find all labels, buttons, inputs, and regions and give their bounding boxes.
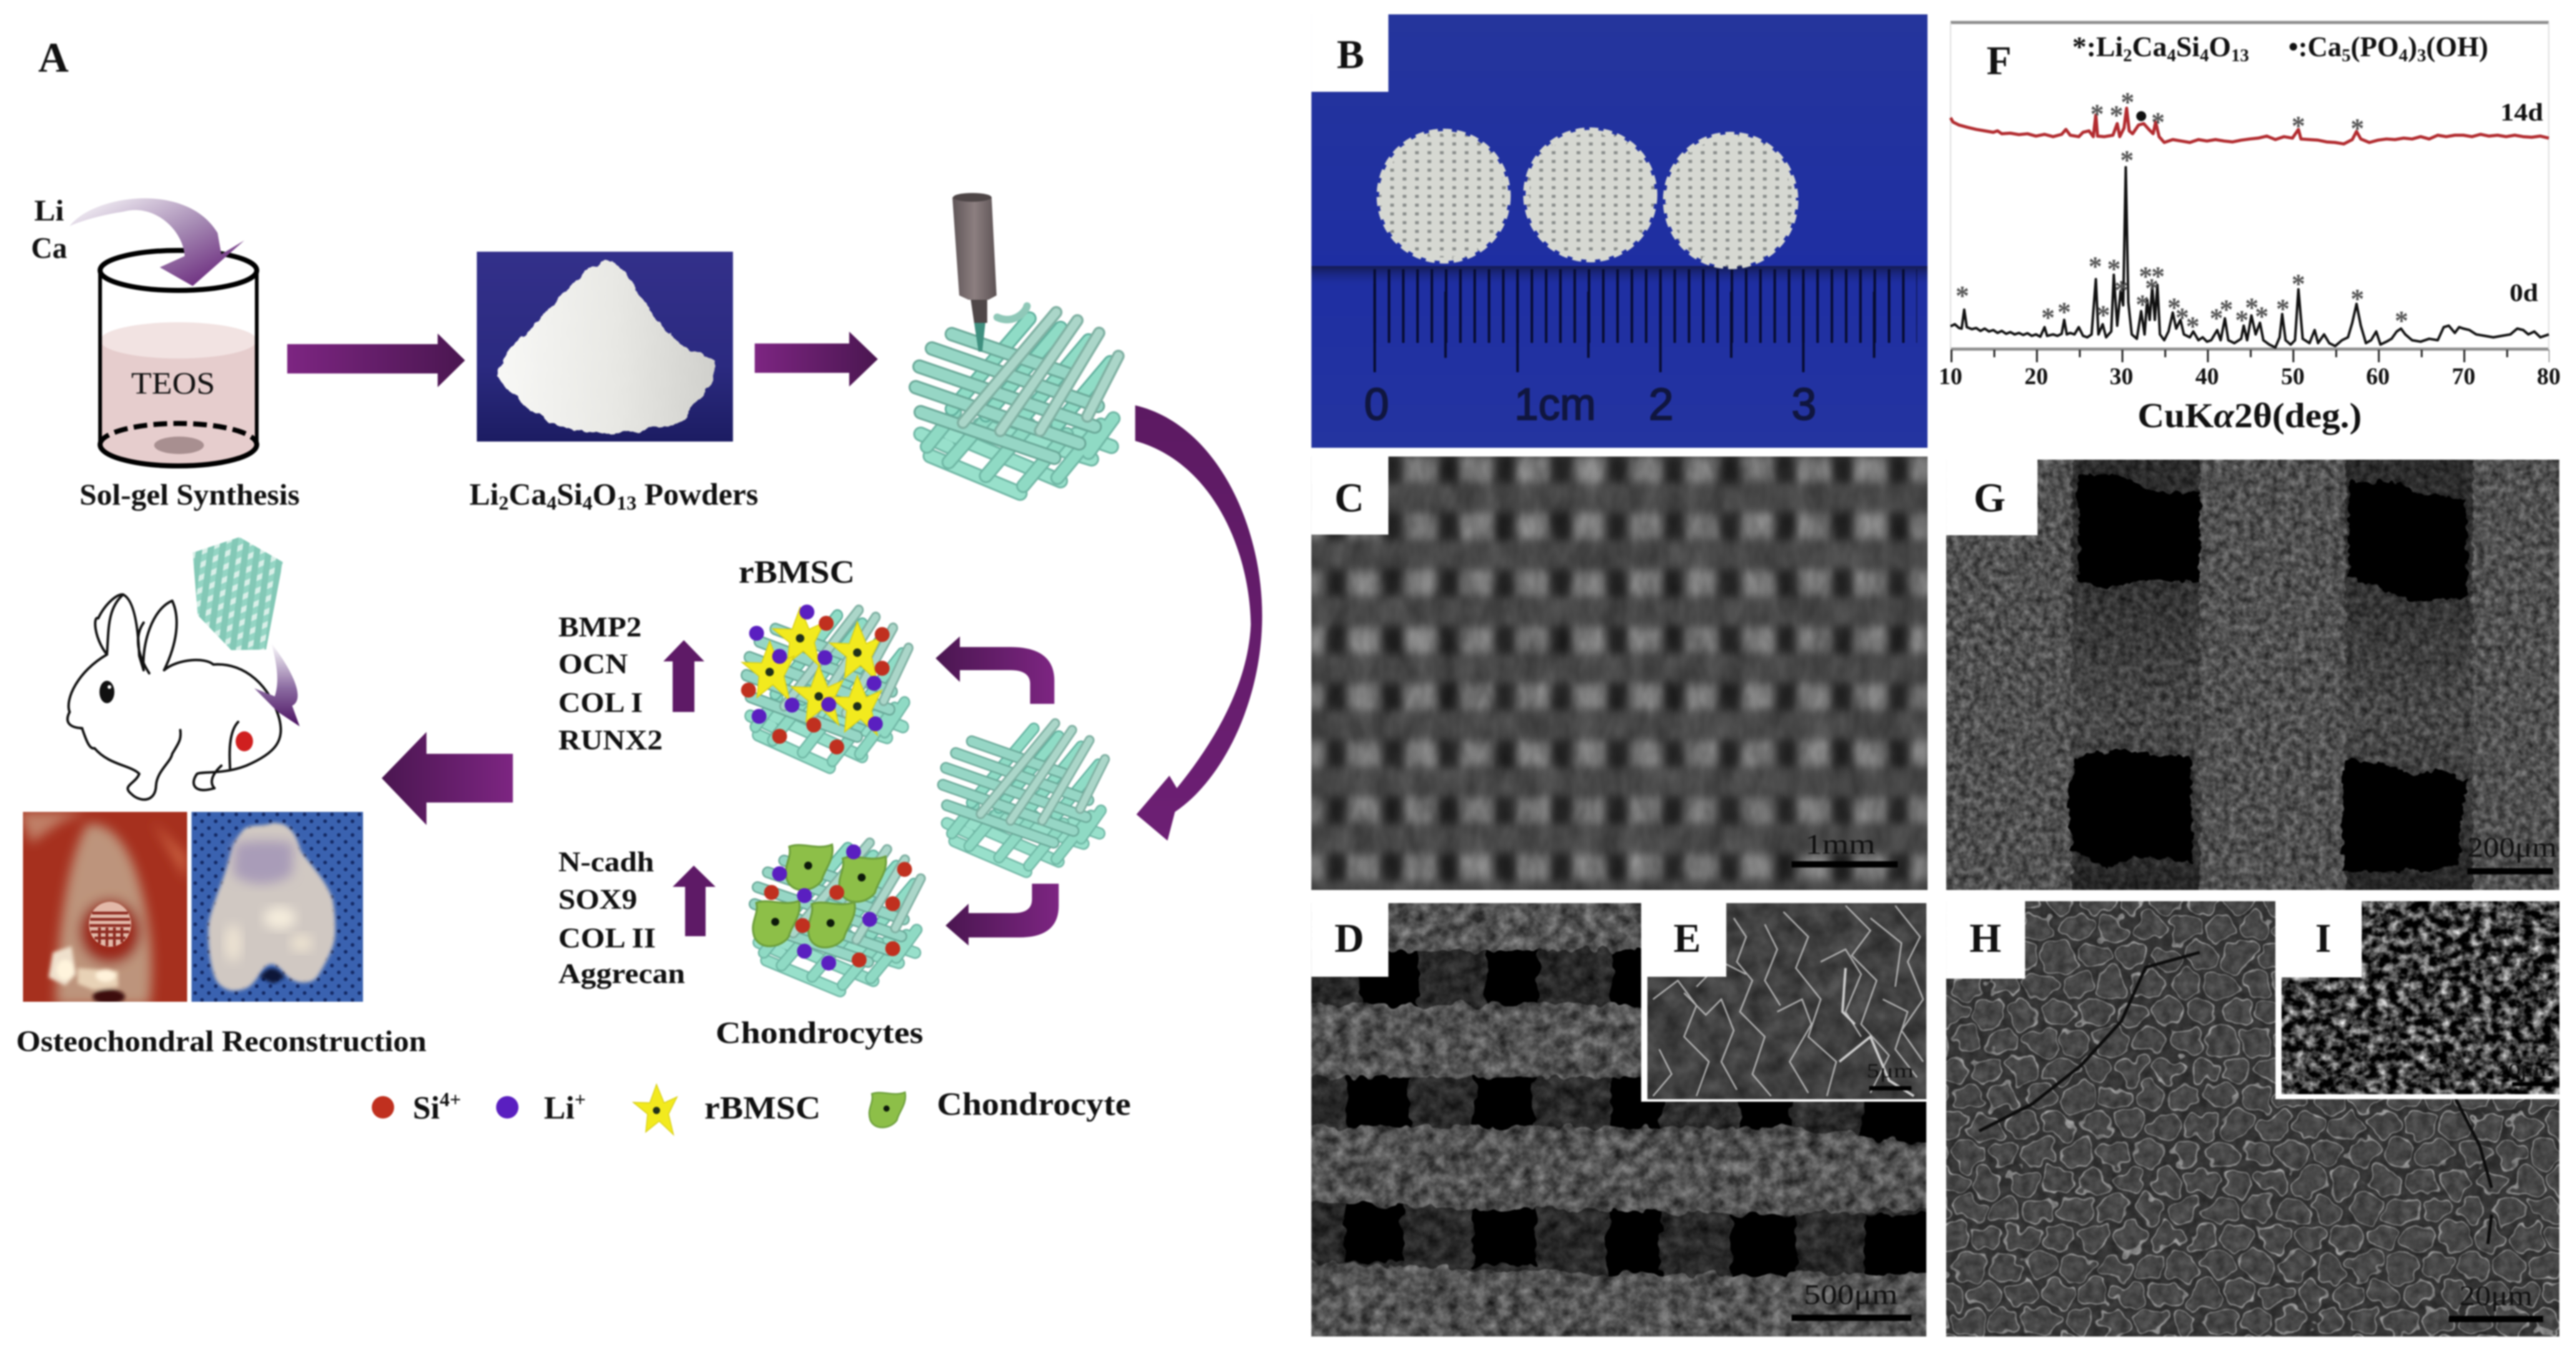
- beaker with TEOS: [100, 250, 257, 466]
- crystal edges: [1653, 906, 1923, 1096]
- peak markers: 0d: *: [2395, 306, 2409, 336]
- legend: Si4+: Si: [413, 1090, 440, 1126]
- gene list: chondrogenic: COL II: [558, 922, 656, 954]
- scale bar 200um: [2467, 831, 2557, 874]
- panel D: SEM scaffold side view: [1299, 893, 1939, 1349]
- peak markers: 14d: *: [2121, 87, 2134, 117]
- legend: rBMSC: rBMSC: [704, 1090, 821, 1126]
- panel C: optical scaffold top view: [1305, 450, 1934, 896]
- scale bar 1mm: [1792, 828, 1898, 867]
- label: Li2Ca4Si4O13 Powders: Ca: [509, 477, 546, 511]
- plain scaffold: [943, 723, 1105, 872]
- rBMSC seeded scaffold: [741, 605, 909, 768]
- legend: Li2Ca4Si4O13: O: [2209, 31, 2231, 62]
- peak markers: 0d: *: [2219, 295, 2233, 325]
- x axis tick labels: [1939, 363, 2560, 390]
- peak markers: 0d: *: [2136, 290, 2149, 320]
- scale bar 20um inset: [2496, 1060, 2553, 1086]
- peak markers: 0d: *: [2096, 300, 2110, 330]
- legend: Si4+: [372, 1089, 461, 1126]
- implant column: [193, 537, 283, 650]
- peak markers: 0d: *: [1955, 281, 1969, 311]
- rabbit eye: [99, 681, 114, 703]
- scaffold disc 3: [1666, 134, 1796, 267]
- peak markers: 0d: *: [2351, 284, 2364, 314]
- gene list: osteogenic: COL I: [558, 686, 643, 718]
- x axis tick labels: 30: [2110, 363, 2133, 390]
- x axis tick labels: 50: [2281, 363, 2304, 390]
- gene list: osteogenic: BMP2: [558, 611, 641, 643]
- scale bar 20um: 20μm: [2459, 1280, 2532, 1312]
- legend: Li2Ca4Si4O13: Si: [2176, 31, 2200, 62]
- letter tab C: [1305, 450, 1388, 535]
- peak markers: 0d: [1955, 146, 2409, 342]
- peak markers: 0d: *: [2276, 294, 2290, 324]
- peak markers: 0d: *: [2139, 262, 2153, 292]
- peak markers: 0d: *: [2107, 254, 2121, 284]
- beaker with TEOS: TEOS: [131, 366, 215, 400]
- gene list: osteogenic: [558, 611, 663, 756]
- label: Li: Li: [34, 194, 64, 227]
- letter tab G: [1940, 453, 2038, 535]
- peak markers: 14d: *: [2151, 107, 2165, 137]
- panel H: SEM surface after mineralization: [1933, 887, 2572, 1349]
- legend: Li+: Li: [544, 1090, 575, 1126]
- up arrow: chondrogenic genes: [673, 866, 716, 936]
- label: Li2Ca4Si4O13 Powders: 4: [546, 492, 556, 514]
- legend: Ca5(PO4)3(OH): (OH): [2426, 31, 2488, 62]
- gene list: chondrogenic: [558, 846, 685, 989]
- defect site: [235, 731, 253, 751]
- legend: Li2Ca4Si4O13: 4: [2167, 46, 2176, 66]
- peak markers: 0d: *: [2120, 146, 2134, 175]
- peak markers: 0d: *: [2176, 303, 2189, 333]
- label: Li2Ca4Si4O13 Powders: Li: [470, 477, 499, 511]
- scale bar 1mm: 1mm: [1805, 828, 1875, 860]
- panel letter I: I: [2315, 916, 2331, 961]
- implanted disc: [89, 902, 131, 947]
- panel letter E: E: [1674, 916, 1701, 961]
- printed scaffold with nozzle: [915, 193, 1118, 493]
- panel letter F: F: [1986, 38, 2011, 84]
- panel letter G: G: [1974, 475, 2006, 521]
- panel A: synthesis and reconstruction schematic: [16, 34, 1262, 1135]
- legend: Chondrocyte: [869, 1087, 1131, 1127]
- x axis tick labels: 80: [2537, 363, 2560, 390]
- legend: Li2Ca4Si4O13: 4: [2200, 46, 2209, 66]
- photo: powder: [477, 252, 733, 442]
- scaffold disc 1: [1379, 131, 1508, 261]
- bent arrow to rBMSC: [935, 636, 1054, 704]
- peak markers: 0d: *: [2235, 305, 2249, 335]
- curve: 0d: [1950, 167, 2549, 347]
- panel I: inset nano-flake surface: [2276, 895, 2560, 1099]
- lattice rows: [1305, 450, 1934, 896]
- crystal texture: [1647, 903, 1927, 1099]
- gene list: osteogenic: OCN: [558, 648, 628, 679]
- legend: [372, 1084, 1131, 1135]
- x axis tick labels: 20: [2025, 363, 2048, 390]
- x axis tick labels: 60: [2366, 363, 2390, 390]
- panel letter C: C: [1335, 475, 1364, 521]
- label: Sol-gel Synthesis: Sol-gel Synthesis: [79, 478, 300, 511]
- inset white border: [2276, 901, 2560, 1099]
- peak markers: 0d: *: [2245, 293, 2259, 323]
- peak markers: 0d: *: [2145, 274, 2159, 304]
- legend: Li2Ca4Si4O13: *:Li: [2072, 31, 2123, 62]
- struts and pores: [1933, 450, 2572, 899]
- peak markers: 0d: *: [2088, 252, 2102, 282]
- chondrocyte seeded scaffold: [753, 843, 920, 991]
- peak markers: 14d: *: [2090, 99, 2104, 129]
- peak markers: 0d: *: [2168, 293, 2181, 323]
- peak markers: 0d: *: [2292, 269, 2305, 299]
- peak markers: 14d: *: [2292, 111, 2305, 141]
- peak markers: 0d: *: [2186, 312, 2199, 342]
- rabbit line drawing: [67, 595, 281, 799]
- panel G: SEM of scaffold struts: [1933, 450, 2572, 899]
- panel F: XRD chart: [1939, 22, 2560, 435]
- right column of photo, chart and micrograph panels: [1299, 8, 2572, 1349]
- photo: reconstructed joint: [192, 812, 363, 1002]
- pore 1: [2078, 474, 2199, 587]
- panel letter D: D: [1335, 916, 1364, 961]
- big arrow to reconstruction: [382, 732, 513, 825]
- legend: Ca5(PO4)3(OH): (PO: [2351, 31, 2399, 62]
- panel B: photo of scaffolds with ruler: [1305, 8, 1928, 448]
- series label 14d: 14d: [2500, 98, 2543, 126]
- bumpy mineral surface: [1933, 887, 2572, 1349]
- scale bar 5um: 5μm: [1867, 1060, 1914, 1082]
- arrow: beaker to powder: [287, 334, 465, 387]
- x axis tick labels: 70: [2452, 363, 2475, 390]
- x axis title: CuKα2θ(deg.): [2138, 397, 2362, 435]
- peak markers: 14d: *: [2351, 114, 2364, 144]
- legend: Ca5(PO4)3(OH): ): [2408, 31, 2417, 62]
- letter tab E: [1641, 897, 1726, 977]
- label: Li2Ca4Si4O13 Powders: Si: [556, 477, 583, 511]
- ruler: 1cm: [1514, 380, 1596, 430]
- label: rBMSC: rBMSC: [739, 555, 855, 590]
- legend: Si4+: 4+: [440, 1089, 461, 1110]
- peak markers: 0d: *: [2115, 275, 2128, 305]
- legend: Chondrocyte: Chondrocyte: [937, 1087, 1131, 1122]
- scale bar 500um: 500μm: [1804, 1278, 1898, 1310]
- scale bar 20um: [2449, 1280, 2543, 1322]
- label: Chondrocytes: Chondrocytes: [716, 1016, 923, 1050]
- label: Li2Ca4Si4O13 Powders: 2: [499, 492, 509, 514]
- panel letter A: A: [38, 34, 69, 81]
- pore 3: [2068, 749, 2193, 868]
- curved arrow: printing to scaffold: [1135, 405, 1262, 841]
- ruler: [1311, 266, 1928, 430]
- label: Osteochondral Reconstruction: Osteochondral Reconstruction: [16, 1025, 427, 1058]
- peak markers: 14d: [2090, 87, 2364, 144]
- arrow: Li and Ca added to beaker: [69, 199, 244, 286]
- panel letter H: H: [1970, 916, 2001, 961]
- peak markers: 0d: *: [2151, 262, 2165, 292]
- up arrow: osteogenic genes: [663, 640, 704, 712]
- ruler: 2: [1649, 380, 1674, 430]
- legend: Li+: [496, 1089, 586, 1126]
- panel letter B: B: [1337, 32, 1364, 77]
- scale bar 500um: [1792, 1278, 1912, 1321]
- letter tab D: [1305, 897, 1388, 977]
- legend: Ca5(PO4)3(OH): 3: [2417, 46, 2426, 66]
- gene list: chondrogenic: SOX9: [558, 883, 637, 915]
- peak markers: 0d: *: [2041, 303, 2055, 333]
- legend: Ca5(PO4)3(OH): 4: [2399, 46, 2408, 66]
- flake texture: [2282, 901, 2559, 1094]
- letter tab H: [1940, 895, 2025, 979]
- x axis tick labels: 10: [1939, 363, 1962, 390]
- legend: rBMSC: [633, 1084, 821, 1135]
- label: Li2Ca4Si4O13 Powders: 4: [583, 492, 593, 514]
- label: Li2Ca4Si4O13 Powders: Powders: [636, 477, 758, 511]
- inset white border: [1641, 903, 1927, 1102]
- gene list: chondrogenic: Aggrecan: [558, 957, 685, 989]
- bent arrow to chondrocytes: [945, 884, 1059, 946]
- label: Li2Ca4Si4O13 Powders: 13: [616, 492, 636, 514]
- gene list: osteogenic: RUNX2: [558, 724, 663, 756]
- peak markers: 0d: *: [2058, 297, 2071, 327]
- photo: surgical implantation: [19, 806, 193, 1009]
- label: Li2Ca4Si4O13 Powders: O: [593, 477, 616, 511]
- label: Ca: Ca: [31, 232, 67, 265]
- legend: Li2Ca4Si4O13: Ca: [2132, 31, 2167, 62]
- legend: Li+: +: [575, 1089, 586, 1110]
- peak markers: 0d: *: [2255, 302, 2269, 332]
- letter tab B: [1305, 8, 1388, 92]
- arrow: powder to printing: [755, 332, 878, 387]
- panel E: inset crystals: [1641, 897, 1927, 1102]
- peak markers: 14d: *: [2110, 101, 2123, 131]
- letter tab I: [2276, 895, 2362, 977]
- series label 0d: 0d: [2510, 279, 2538, 307]
- scale bar 5um: [1867, 1060, 1914, 1090]
- x axis tick labels: 40: [2195, 363, 2219, 390]
- curve: 14d: [1950, 108, 2549, 144]
- pore 2: [2349, 482, 2468, 603]
- ruler: 3: [1792, 380, 1817, 430]
- arrow: implant to rabbit: [254, 643, 300, 726]
- ruler: 0: [1364, 380, 1389, 430]
- scaffold disc 2: [1526, 130, 1655, 260]
- chart frame: [1950, 22, 2549, 356]
- gene list: chondrogenic: N-cadh: [558, 846, 654, 877]
- rough bands and columns: [1299, 893, 1939, 1349]
- legend: Li2Ca4Si4O13: 13: [2231, 46, 2249, 66]
- scale bar 20um inset: 20μm: [2496, 1060, 2553, 1080]
- legend: Li2Ca4Si4O13: 2: [2123, 46, 2132, 66]
- pore 4: [2342, 759, 2467, 871]
- legend: Ca5(PO4)3(OH): •:Ca: [2289, 31, 2342, 62]
- legend: Ca5(PO4)3(OH): 5: [2342, 46, 2351, 66]
- peak markers: 0d: *: [2209, 304, 2223, 334]
- cracks: [1979, 952, 2492, 1244]
- scale bar 200um: 200μm: [2467, 831, 2557, 863]
